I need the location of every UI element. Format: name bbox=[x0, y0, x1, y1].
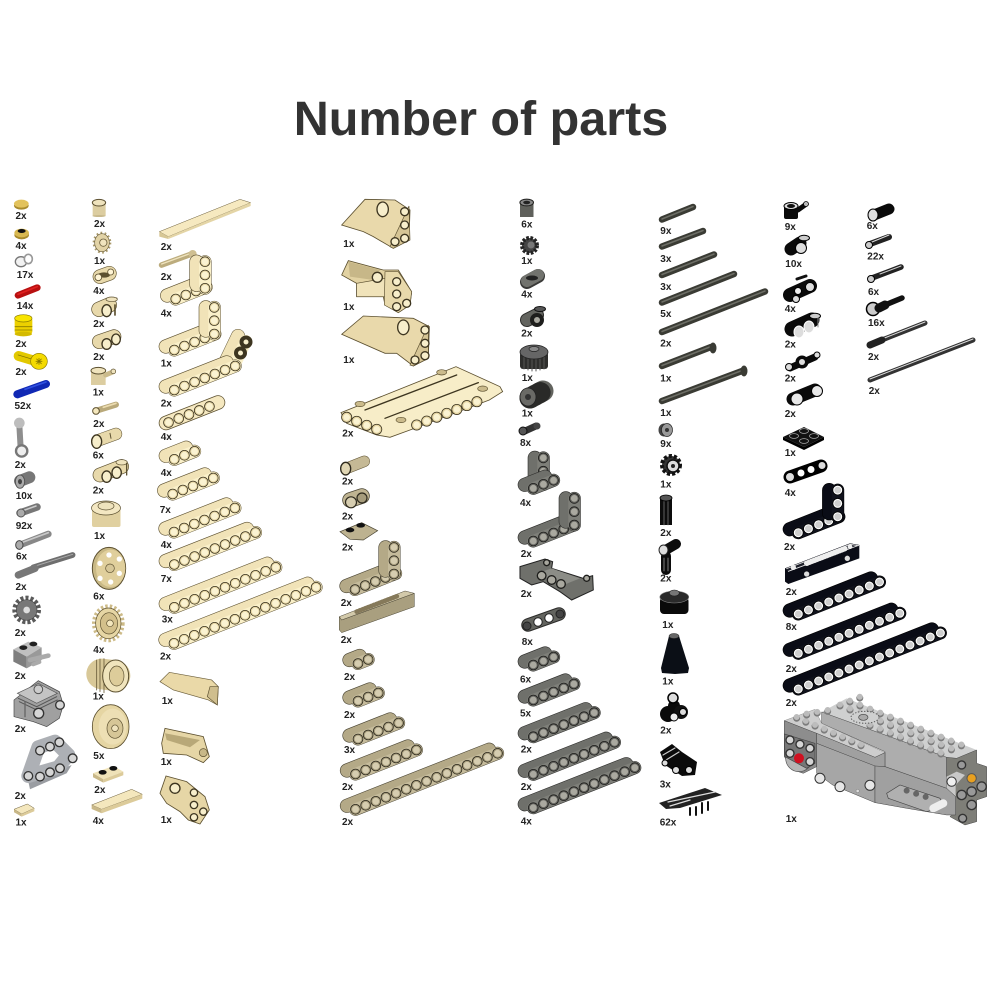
part: dark round brick 1x: 1x bbox=[522, 373, 533, 384]
part: tan large gear 4x: 4x bbox=[93, 645, 105, 656]
part: black elbow 2x bbox=[659, 544, 676, 584]
part: axle length 5, 3x: 3x bbox=[660, 254, 672, 265]
part: dark tan double connector 2x bbox=[342, 493, 367, 522]
part: tan round brick 1x bbox=[92, 501, 120, 542]
part: light grey connector 17x: 17x bbox=[17, 270, 34, 281]
part: dark pin 8x bbox=[519, 422, 540, 449]
part: gold round tile 2x bbox=[14, 200, 29, 222]
part: tan L beam long 1x bbox=[161, 307, 215, 370]
part: tan 3-hole beam 4x bbox=[161, 448, 195, 479]
part: dark L beam 2x: 2x bbox=[521, 549, 532, 560]
part: black rack beam 2x: 2x bbox=[786, 587, 797, 598]
part: black grey axle 2x bbox=[868, 322, 925, 363]
part: black double connector 4x: 4x bbox=[785, 304, 796, 315]
part: black 15-hole beam 2x bbox=[786, 630, 940, 709]
part: tan wedge panel large 1x bbox=[342, 199, 410, 250]
column 8 black pins and axles bbox=[866, 209, 973, 397]
part: grey motor unit 1x bbox=[784, 697, 987, 825]
part: grey axle pin 2x bbox=[16, 554, 73, 593]
part: dark cylinder 6x: 6x bbox=[521, 220, 533, 230]
part: grey pin long 6x: 6x bbox=[16, 552, 28, 562]
part: tan 15-hole beam 2x: 2x bbox=[160, 652, 172, 662]
part: tan wedge panel 1x bbox=[342, 316, 429, 366]
part: tan thin liftarm 4x bbox=[93, 269, 114, 297]
part: dark H frame 2x bbox=[520, 559, 593, 600]
part: axle length 8, 5x: 5x bbox=[660, 309, 672, 320]
part: tan long tile 4x: 4x bbox=[93, 816, 104, 827]
part: tan notched wheel 5x: 5x bbox=[93, 751, 105, 762]
column 1 small parts bbox=[13, 200, 77, 828]
part: dark tan plate with studs 2x bbox=[340, 523, 378, 554]
part: grey bush 10x bbox=[15, 475, 33, 502]
part: tan small gear 1x: 1x bbox=[94, 256, 106, 267]
part: dark pin 8x: 8x bbox=[520, 438, 532, 449]
part: dark small gear 1x: 1x bbox=[521, 256, 533, 267]
part: tan long tile 4x bbox=[92, 789, 142, 827]
part: long tan tile 2x bbox=[159, 199, 251, 253]
column 3 light tan beams bbox=[159, 199, 316, 826]
part: tan tile 1x bbox=[14, 804, 34, 828]
part: dark connector 2x bbox=[521, 306, 546, 340]
part: grey triangular frame 2x: 2x bbox=[15, 791, 26, 802]
part: grey brick with pins 2x: 2x bbox=[15, 671, 26, 682]
part: dark tan 5-hole beam 3x: 3x bbox=[344, 745, 356, 756]
column 2 tan small parts bbox=[91, 199, 142, 827]
part: tan thin beam 4x: 4x bbox=[161, 432, 172, 443]
part: dark tan pin connector 2x: 2x bbox=[342, 476, 354, 488]
part: tan cylinder with pin 1x: 1x bbox=[93, 388, 104, 398]
part: axle length 4, 9x: 9x bbox=[660, 226, 672, 237]
part: tan 7-hole beam 4x: 4x bbox=[161, 540, 172, 551]
part: black round brick 1x: 1x bbox=[662, 620, 674, 631]
part: grey pin long 6x bbox=[16, 533, 48, 562]
part: dark small gear 1x bbox=[521, 238, 537, 267]
part: black square plate 1x: 1x bbox=[785, 448, 796, 459]
part: black double connector 4x bbox=[785, 276, 814, 315]
part: yellow axle pin 2x: 2x bbox=[16, 367, 27, 378]
part: dark connector 2x: 2x bbox=[521, 328, 533, 340]
part: tan wheel hub 6x: 6x bbox=[93, 592, 105, 602]
part: tan 9-hole beam 7x bbox=[161, 529, 256, 585]
part: grey piston rod 2x bbox=[14, 418, 27, 471]
part: tan thin liftarm 4x: 4x bbox=[93, 286, 105, 297]
part: tan axle pin 2x: 2x bbox=[161, 272, 172, 283]
part: dark round brick 1x bbox=[520, 345, 548, 384]
column 5 dark grey parts bbox=[519, 199, 635, 828]
part: dark cylinder 6x bbox=[520, 199, 534, 230]
part: tan wide panel 2x bbox=[341, 367, 503, 440]
part: black connector stack 3x: 3x bbox=[660, 780, 671, 790]
part: black thin beam 4x bbox=[785, 462, 826, 499]
part: black grey long axle 2x: 2x bbox=[869, 386, 880, 397]
part: black white gear 1x: 1x bbox=[660, 480, 672, 490]
part: tan open panel 1x: 1x bbox=[161, 757, 172, 768]
part: grey motor unit 1x: 1x bbox=[786, 814, 797, 825]
part: tan wheel with grooves 1x bbox=[93, 659, 129, 702]
part: tan bent beam 2x bbox=[161, 336, 250, 410]
part: black cylinder with pin 9x bbox=[784, 202, 808, 233]
part: tan cylinder 2x bbox=[92, 199, 106, 230]
part: dark tan double connector 2x: 2x bbox=[342, 512, 354, 522]
part: black white axle pin 6x bbox=[868, 266, 901, 298]
column 4 tan panels and dark tan beams bbox=[339, 199, 503, 828]
part: red axle pin 14x bbox=[17, 287, 37, 312]
part: dark tan plate with studs 2x: 2x bbox=[342, 542, 354, 554]
part: tan cylinder with pin 1x bbox=[91, 367, 116, 398]
part: grey bushing 9x bbox=[658, 424, 672, 450]
part: dark 11-hole beam 4x bbox=[521, 764, 635, 828]
part: black pin connector 2x bbox=[785, 352, 820, 384]
part: dark tan rack beam 2x: 2x bbox=[341, 635, 352, 646]
part: dark L beam 2x bbox=[521, 498, 574, 560]
part: yellow cylinder 2x: 2x bbox=[16, 339, 27, 350]
part: gold round plate 4x: 4x bbox=[16, 241, 27, 252]
part: tan open wedge panel 1x: 1x bbox=[343, 302, 355, 313]
part: dark T beam 4x bbox=[520, 458, 554, 509]
part: yellow axle pin 2x bbox=[16, 353, 47, 378]
part: grey bush 10x: 10x bbox=[16, 491, 33, 502]
part: blue pin 52x bbox=[14, 382, 46, 412]
part: black connector stack 3x bbox=[660, 744, 697, 790]
part: dark 5-hole beam 5x bbox=[520, 680, 574, 720]
part: dark 3-hole beam 6x: 6x bbox=[520, 674, 532, 686]
part: tan open panel 1x bbox=[161, 728, 209, 768]
part: axle with stop 1x bbox=[660, 342, 716, 384]
part: black 11-hole beam 2x bbox=[786, 610, 900, 675]
part: red axle pin 14x: 14x bbox=[17, 301, 34, 312]
part: tan 5-hole beam 7x: 7x bbox=[160, 505, 171, 516]
part: tan double connector 2x bbox=[93, 334, 120, 363]
part: tan wheel with grooves 1x: 1x bbox=[93, 692, 104, 702]
part: black white pin 22x bbox=[866, 235, 889, 262]
part: tan tile 1x: 1x bbox=[16, 818, 27, 828]
part: dark tan 15-hole beam 2x bbox=[342, 750, 498, 828]
part: tan axle pin 2x bbox=[161, 250, 197, 283]
part: tan 5-hole beam 7x bbox=[160, 474, 213, 516]
part: dark H frame 2x: 2x bbox=[521, 589, 532, 600]
part: blue pin 52x: 52x bbox=[14, 401, 32, 412]
part: axle length 4, 9x bbox=[660, 206, 693, 237]
part: black pin connector 2x: 2x bbox=[785, 374, 796, 384]
part: dark 7-hole beam 2x bbox=[521, 709, 594, 756]
part: black L beam 2x: 2x bbox=[784, 542, 796, 553]
part: black pin with bush 16x bbox=[866, 298, 902, 329]
part: yellow cylinder 2x bbox=[15, 315, 32, 350]
part: black 15-hole beam 2x: 2x bbox=[786, 698, 797, 709]
part: black round brick 1x bbox=[660, 590, 689, 631]
part: black axle connector 2x bbox=[785, 386, 822, 420]
part: dark tan 15-hole beam 2x: 2x bbox=[342, 817, 354, 828]
part: black white axle pin 6x: 6x bbox=[868, 287, 880, 298]
part: black 9-hole beam 8x bbox=[786, 578, 880, 633]
column 6 axles and black parts bbox=[658, 206, 765, 828]
part: dark 9-hole beam 2x: 2x bbox=[521, 782, 532, 793]
part: dark tan 2-hole beam 2x: 2x bbox=[344, 672, 356, 683]
part: tan curved panel 1x: 1x bbox=[161, 815, 172, 826]
part: black white gear 1x bbox=[660, 456, 680, 490]
part: axle length 6, 3x: 3x bbox=[660, 282, 672, 293]
part: black connector 10x bbox=[785, 235, 810, 270]
part: dark grey gear 2x bbox=[15, 598, 39, 639]
part: grey pin 92x: 92x bbox=[16, 521, 33, 532]
part: gold round tile 2x: 2x bbox=[16, 211, 27, 222]
part: tan pin 2x bbox=[93, 403, 116, 430]
part: black axle connector 2x: 2x bbox=[785, 409, 796, 420]
part: tan wheel hub 6x bbox=[92, 547, 126, 602]
part: grey pin 92x bbox=[16, 506, 37, 532]
part: axle length 5, 3x bbox=[660, 230, 703, 265]
part: tan thin beam 4x bbox=[161, 402, 219, 443]
part: tan large gear 4x bbox=[93, 607, 122, 656]
part: tan notched wheel 5x bbox=[92, 705, 129, 762]
part: black grey long axle 2x bbox=[869, 339, 973, 397]
part: dark thin liftarm 4x bbox=[521, 275, 538, 300]
part: long tan tile 2x: 2x bbox=[161, 242, 172, 253]
part: gold round plate 4x bbox=[14, 229, 29, 252]
part: grey bushing 9x: 9x bbox=[660, 439, 672, 450]
part: tan open wedge panel 1x bbox=[342, 261, 412, 313]
part: black triple connector 2x bbox=[785, 313, 820, 350]
part: light grey connector 17x bbox=[15, 254, 34, 281]
part: tan plate with studs 2x: 2x bbox=[94, 785, 106, 796]
part: tan wide panel 2x: 2x bbox=[342, 428, 354, 440]
part: dark tan 3-hole beam 2x: 2x bbox=[344, 710, 356, 721]
part: dark thin liftarm 4x: 4x bbox=[521, 290, 533, 300]
part: black connector cluster 2x bbox=[660, 693, 688, 736]
part: dark tan 7-hole beam 2x: 2x bbox=[342, 782, 354, 793]
part: dark tan pin connector 2x bbox=[341, 461, 364, 488]
part: axle length 6, 3x bbox=[660, 254, 714, 293]
part: tan triple connector 2x: 2x bbox=[93, 486, 104, 496]
part: tan 3-hole beam 4x: 4x bbox=[161, 468, 172, 479]
part: dark tan L beam 2x: 2x bbox=[341, 598, 352, 609]
part: axle length 8, 5x bbox=[660, 274, 734, 320]
part: tan L beam 4x bbox=[161, 262, 206, 320]
part: black tall cylinder 2x: 2x bbox=[660, 528, 672, 539]
part: tan L beam 4x: 4x bbox=[161, 308, 172, 320]
part: black elbow 2x: 2x bbox=[660, 574, 672, 584]
part: dark tan 5-hole beam 3x bbox=[344, 720, 399, 756]
part: black connector cluster 2x: 2x bbox=[660, 726, 672, 736]
part: grey piston rod 2x: 2x bbox=[15, 460, 26, 471]
part: tan 15-hole beam 2x bbox=[160, 584, 316, 662]
part: black pin connector 6x: 6x bbox=[867, 221, 878, 232]
title: Number of parts bbox=[294, 92, 668, 146]
part: dark 5-hole beam 5x: 5x bbox=[520, 708, 532, 720]
part: tan wedge panel large 1x: 1x bbox=[343, 239, 355, 250]
part: dark grey gear 2x: 2x bbox=[15, 628, 26, 639]
part: black 11-hole beam 2x: 2x bbox=[786, 664, 797, 675]
part: tan long pin connector 6x bbox=[92, 433, 116, 462]
part: tan wedge panel 1x: 1x bbox=[343, 355, 355, 366]
part: black tall cylinder 2x bbox=[660, 495, 672, 539]
part: tan triple connector 2x bbox=[93, 460, 127, 496]
part: tan plate with studs 2x bbox=[93, 766, 123, 796]
part: long axle with stop 1x: 1x bbox=[660, 408, 672, 419]
part: tan cylinder 2x: 2x bbox=[94, 219, 106, 230]
part: dark 11-hole beam 4x: 4x bbox=[521, 816, 532, 828]
part: dark thin beam 8x bbox=[522, 610, 564, 648]
part: tan wedge panel 1x bbox=[160, 672, 218, 707]
part: dark 3-hole beam 6x bbox=[520, 654, 554, 686]
part: grey engine block 2x: 2x bbox=[15, 724, 26, 735]
part: long axle with stop 1x bbox=[660, 366, 748, 419]
part: tan long pin connector 6x: 6x bbox=[93, 450, 104, 462]
part: black rack beam 2x bbox=[785, 543, 859, 598]
part: tan double connector 2x: 2x bbox=[93, 352, 105, 363]
part: tan bent beam 2x: 2x bbox=[161, 398, 172, 410]
part: tan 7-hole beam 4x bbox=[161, 504, 235, 551]
part: dark tan rack beam 2x bbox=[339, 591, 414, 646]
part: dark tan 3-hole beam 2x bbox=[344, 690, 378, 721]
part: tan curved panel 1x bbox=[160, 776, 209, 826]
part: tan 11-hole beam 3x: 3x bbox=[162, 614, 173, 626]
part: black connector 10x: 10x bbox=[785, 259, 802, 270]
part: tan wedge panel 1x: 1x bbox=[162, 696, 173, 707]
part: dark tan L beam 2x bbox=[341, 547, 396, 609]
part: grey triangular frame 2x bbox=[15, 738, 77, 802]
part: black 9-hole beam 8x: 8x bbox=[786, 622, 797, 633]
part: black triple connector 2x: 2x bbox=[785, 340, 796, 350]
part: tan connector 2x: 2x bbox=[93, 319, 105, 330]
part: black flat rail 62x bbox=[659, 788, 722, 828]
part: dark worm gear 1x: 1x bbox=[522, 408, 533, 420]
part: axle length 12, 2x bbox=[660, 291, 765, 350]
part: tan round brick 1x: 1x bbox=[94, 531, 106, 542]
part: axle length 12, 2x: 2x bbox=[660, 338, 672, 350]
part: tan small gear 1x bbox=[94, 233, 110, 267]
part: tan 9-hole beam 7x: 7x bbox=[161, 574, 172, 585]
part: axle with stop 1x: 1x bbox=[660, 374, 672, 384]
part: black square plate 1x bbox=[783, 427, 824, 459]
part: black cylinder with pin 9x: 9x bbox=[785, 222, 796, 233]
part: dark thin beam 8x: 8x bbox=[522, 637, 533, 648]
part: tan L beam long 1x: 1x bbox=[161, 358, 172, 370]
part: black thin beam 4x: 4x bbox=[785, 488, 796, 499]
part: black cone 1x: 1x bbox=[662, 676, 674, 688]
part: tan connector 2x bbox=[93, 297, 117, 330]
part: dark 7-hole beam 2x: 2x bbox=[521, 744, 532, 756]
column 7 black beams and connectors bbox=[783, 202, 987, 825]
part: dark T beam 4x: 4x bbox=[520, 498, 532, 509]
part: dark tan 7-hole beam 2x bbox=[342, 746, 416, 793]
part: black grey axle 2x: 2x bbox=[868, 352, 880, 363]
part: dark worm gear 1x bbox=[520, 388, 543, 420]
part: dark 9-hole beam 2x bbox=[521, 739, 615, 793]
part: grey brick with pins 2x bbox=[13, 642, 48, 682]
part: black flat rail 62x: 62x bbox=[660, 818, 677, 828]
part: black L beam 2x bbox=[784, 490, 839, 553]
part: grey engine block 2x bbox=[14, 681, 64, 735]
part: black pin connector 6x bbox=[867, 209, 889, 232]
part: grey axle pin 2x: 2x bbox=[16, 582, 27, 593]
part: dark tan 2-hole beam 2x bbox=[344, 656, 368, 683]
part: black cone 1x bbox=[661, 634, 689, 688]
part: tan pin 2x: 2x bbox=[93, 419, 105, 430]
part: black pin with bush 16x: 16x bbox=[868, 318, 885, 329]
part: black white pin 22x: 22x bbox=[867, 252, 884, 262]
part: tan 11-hole beam 3x bbox=[162, 564, 276, 626]
